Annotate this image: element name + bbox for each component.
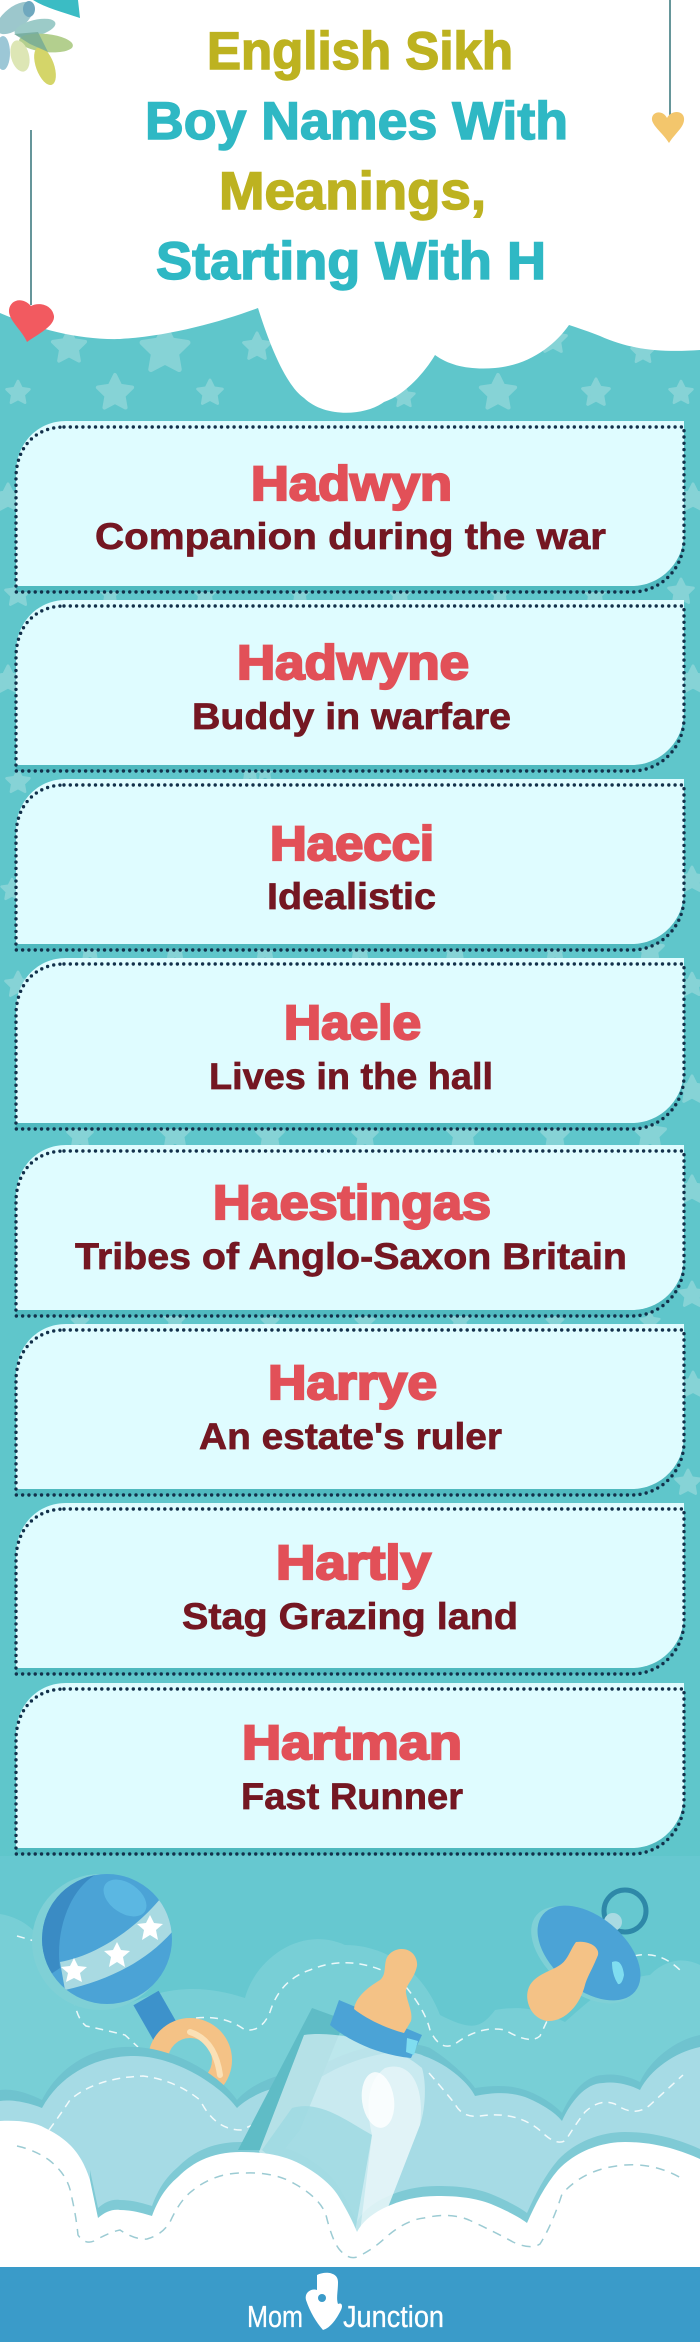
panel: Hadwyne: Hadwyne (237, 637, 469, 690)
panel: Haestingas: Haestingas (213, 1177, 491, 1230)
panel: Haestingas: Tribes of Anglo-Saxon Britain (75, 1236, 627, 1277)
panel: Hadwyn: Hadwyn (251, 458, 452, 511)
panel: Haestingas (16, 1145, 684, 1316)
icon: yellow heart (652, 112, 684, 143)
panel: Hartly: Hartly (276, 1537, 431, 1590)
icon: rattle (32, 1872, 222, 2092)
cloud: white foreground (0, 2121, 700, 2270)
dashed lines: mid cloud (49, 2073, 683, 2142)
panel: Hartly: Stag Grazing land (182, 1596, 518, 1637)
header cloud (0, 0, 700, 413)
panel: Hadwyn (16, 421, 684, 592)
panel: Hadwyne (16, 600, 684, 771)
title: English Sikh (207, 22, 513, 81)
title: Meanings, (219, 162, 486, 221)
panel: Haele (16, 958, 684, 1129)
scene backdrop (0, 1856, 700, 2156)
logo: MomJunction: Mom (247, 2299, 303, 2334)
icon: red heart (9, 300, 54, 342)
white cloud backing band (90, 2132, 700, 2250)
panel: Hadwyne: Buddy in warfare (192, 696, 511, 737)
footer band (0, 2267, 700, 2342)
panel: Haecci: Idealistic (267, 876, 436, 917)
left string (30, 130, 32, 305)
panel: Haele: Haele (284, 997, 421, 1050)
logo: MomJunction: Junction (343, 2299, 444, 2334)
cloud band: darker edge (0, 2035, 700, 2200)
right string (669, 0, 671, 116)
far cloud layer (0, 1914, 700, 2150)
panel: Hadwyn: Companion during the war (95, 516, 606, 557)
panel: Harrye: Harrye (268, 1357, 437, 1410)
panel: Hartly (16, 1503, 684, 1674)
title: Starting With H (156, 232, 546, 291)
logo: MomJunction (247, 2273, 444, 2334)
panel: Hartman: Fast Runner (241, 1776, 463, 1817)
panel: Hartman (16, 1683, 684, 1854)
dashed lines: upper (17, 1936, 681, 2047)
icon: baby bottle (238, 1949, 425, 2236)
title: Boy Names With (145, 92, 568, 151)
icon: pacifier (513, 1887, 658, 2022)
panel: Harrye: An estate's ruler (199, 1416, 502, 1457)
panel: Hartman: Hartman (242, 1717, 462, 1770)
background stars (0, 326, 700, 1494)
panel: Haecci (16, 779, 684, 950)
dashed lines: white cloud (17, 2146, 681, 2258)
title (145, 22, 568, 291)
icon: watercolor leaves (0, 0, 74, 88)
panel: Harrye (16, 1324, 684, 1495)
panel: Haecci: Haecci (270, 818, 434, 871)
cloud: mid layer (0, 2047, 700, 2240)
top-left teal corner (33, 0, 80, 18)
panel: Haele: Lives in the hall (209, 1056, 493, 1097)
